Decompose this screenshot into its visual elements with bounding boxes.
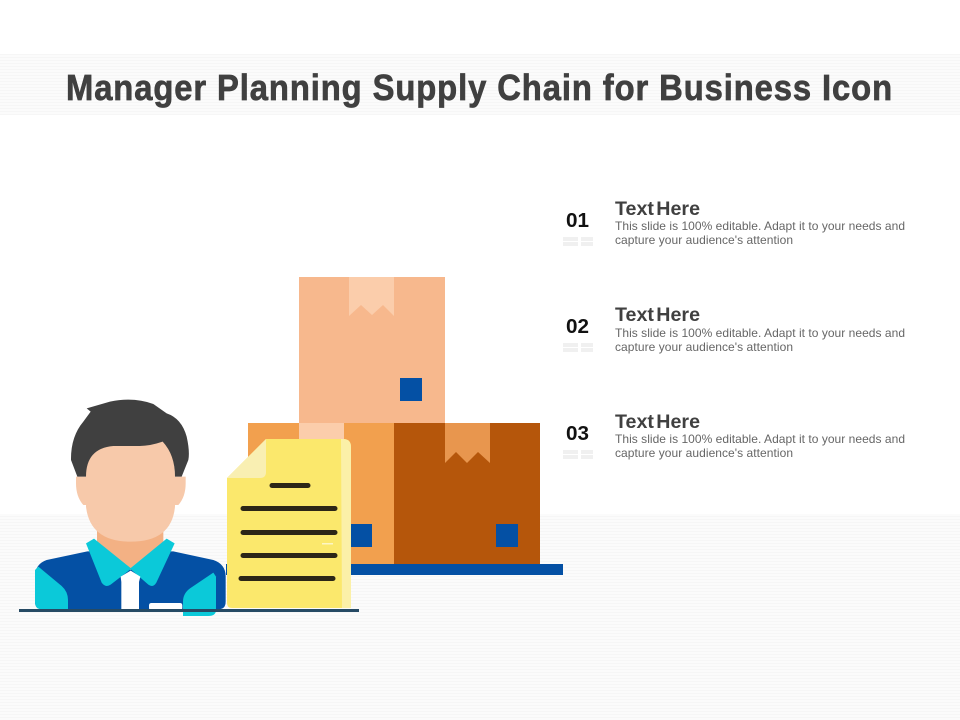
collar: [86, 539, 131, 586]
number underline 03: [563, 450, 593, 459]
heading 03: Text Here: [615, 412, 700, 433]
title: Manager Planning Supply Chain for Business Icon: [66, 67, 893, 108]
tie: [121, 571, 140, 609]
body 02: capture your audience's attention: [615, 340, 793, 354]
icon: manager: [35, 400, 226, 616]
pallet: [226, 564, 563, 575]
left sleeve: [35, 567, 68, 609]
heading 02: Text Here: [615, 305, 700, 326]
number 03: 03: [566, 423, 589, 445]
icon: stacked boxes: [226, 277, 563, 575]
face: [86, 442, 175, 542]
item 01: [563, 199, 905, 247]
item 02: [563, 305, 905, 354]
body 03: This slide is 100% editable. Adapt it to your needs and: [615, 432, 905, 446]
right sleeve: [183, 573, 216, 616]
hair: [71, 400, 189, 477]
body 02: [615, 326, 905, 354]
item 03: [563, 412, 905, 460]
body 03: capture your audience's attention: [615, 446, 793, 460]
badge: [149, 603, 182, 610]
heading 01: Text Here: [615, 199, 700, 220]
body 02: This slide is 100% editable. Adapt it to your needs and: [615, 326, 905, 340]
number underline 01: [563, 237, 593, 246]
ears: [76, 477, 87, 505]
ground line: [19, 609, 359, 612]
number 02: 02: [566, 316, 589, 338]
body 01: [615, 219, 905, 247]
body 03: [615, 432, 905, 460]
body 01: This slide is 100% editable. Adapt it to your needs and: [615, 219, 905, 233]
bottom left box: [248, 423, 394, 564]
number underline 02: [563, 343, 593, 352]
jacket: [35, 551, 226, 609]
top box: [299, 277, 445, 423]
document lines: [241, 486, 335, 578]
number 01: 01: [566, 210, 589, 232]
neck: [97, 523, 163, 570]
body 01: capture your audience's attention: [615, 233, 793, 247]
icon: document: [227, 439, 351, 608]
bottom right box: [394, 423, 540, 564]
